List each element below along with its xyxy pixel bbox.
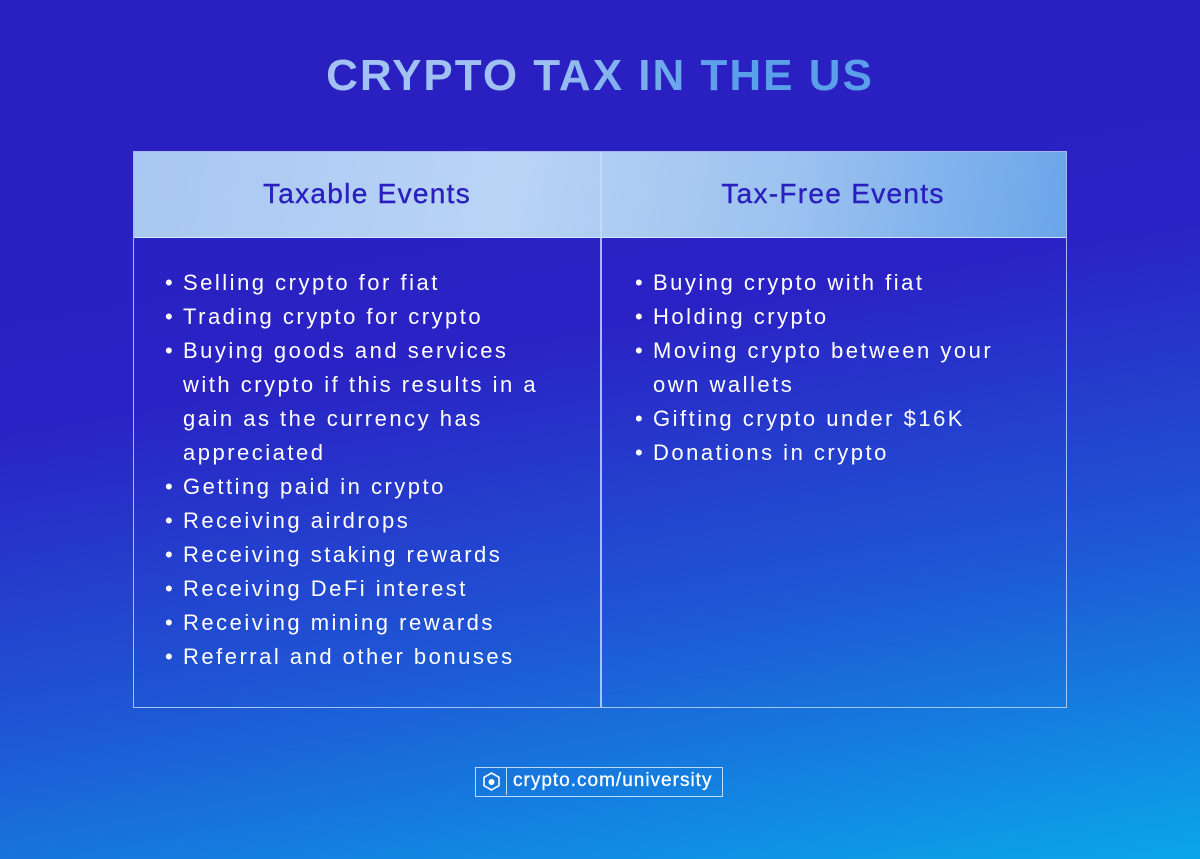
- table: [133, 151, 1067, 708]
- list: tax-free events: Buying crypto with fiat: [653, 270, 924, 295]
- list: taxable events: Receiving DeFi interest: [183, 576, 468, 601]
- list: taxable events: Receiving staking rewards: [183, 542, 502, 567]
- list: tax-free events: Holding crypto: [653, 304, 829, 329]
- title: [0, 51, 1200, 101]
- title: CRYPTO TAX IN THE US: [326, 51, 874, 100]
- list: taxable events: Getting paid in crypto: [183, 474, 446, 499]
- footer: crypto.com/university: crypto.com/university: [513, 770, 712, 791]
- list: taxable events: gain as the currency has: [183, 406, 483, 431]
- list: taxable events: appreciated: [183, 440, 325, 465]
- list: taxable events: with crypto if this results in a: [183, 372, 538, 397]
- list: tax-free events: [636, 270, 993, 465]
- list: tax-free events: own wallets: [653, 372, 794, 397]
- footer: crypto.com/university: [475, 767, 723, 797]
- heading: taxable: Taxable Events: [263, 178, 471, 209]
- list: tax-free events: Gifting crypto under $16K: [653, 406, 965, 431]
- icon: logo: [476, 768, 507, 795]
- list: tax-free events: Donations in crypto: [653, 440, 889, 465]
- list: taxable events: Buying goods and services: [183, 338, 508, 363]
- list: taxable events: Trading crypto for crypto: [183, 304, 483, 329]
- list: tax-free events: Moving crypto between your: [653, 338, 993, 363]
- list: taxable events: [166, 270, 538, 669]
- list: taxable events: Selling crypto for fiat: [183, 270, 440, 295]
- heading: tax-free: Tax-Free Events: [721, 178, 945, 209]
- list: taxable events: Receiving mining rewards: [183, 610, 495, 635]
- list: taxable events: Receiving airdrops: [183, 508, 410, 533]
- list: taxable events: Referral and other bonuses: [183, 644, 515, 669]
